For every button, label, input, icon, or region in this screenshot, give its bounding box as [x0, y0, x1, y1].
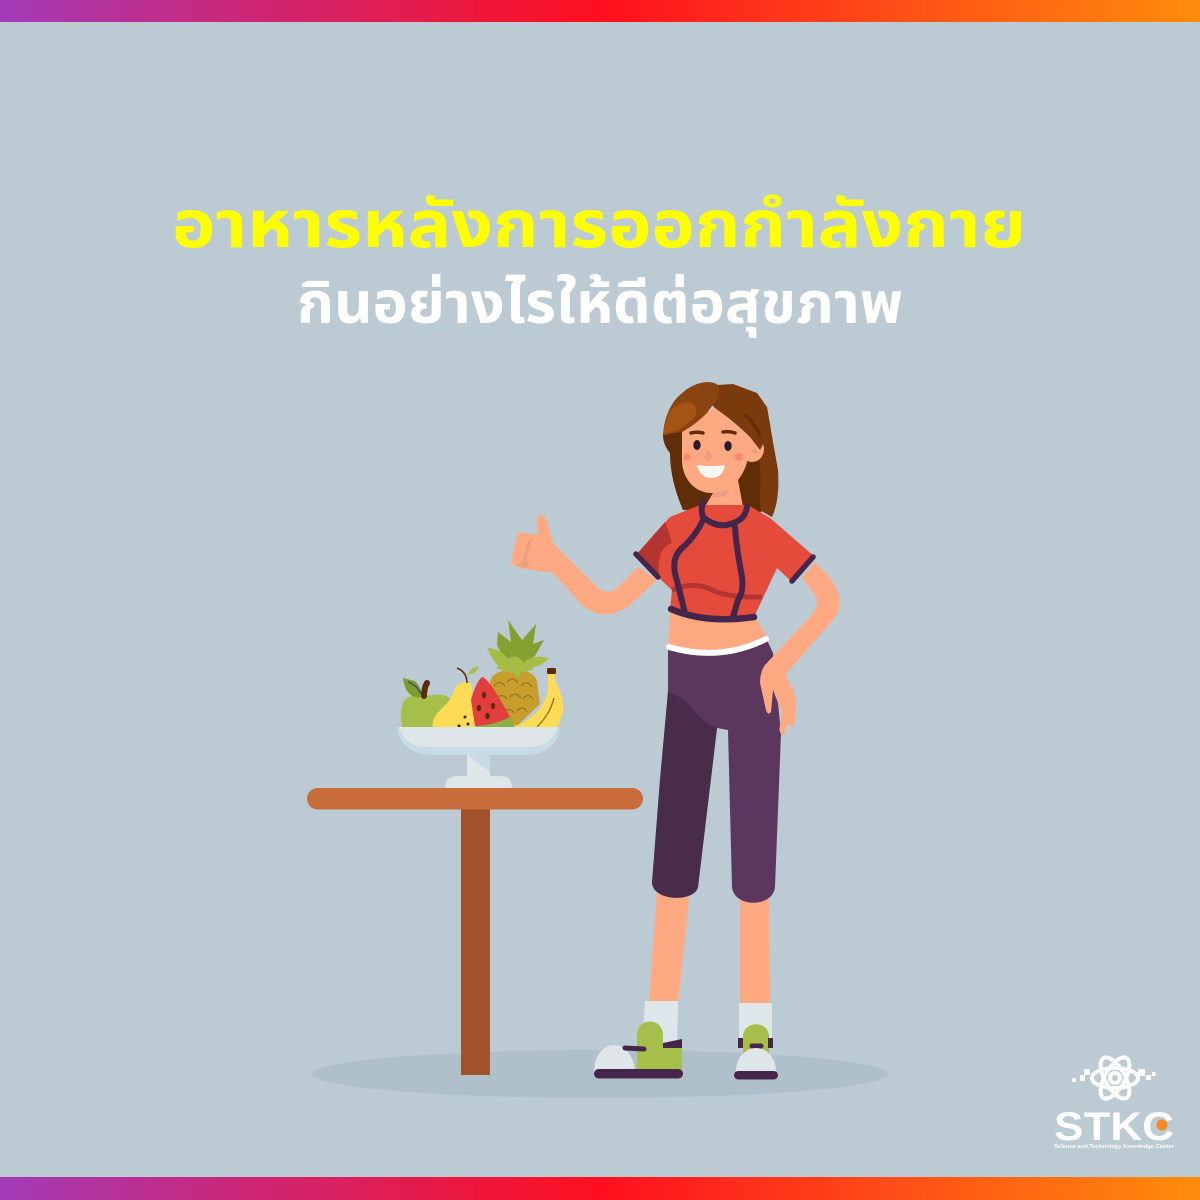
shirt: [636, 502, 815, 619]
logo wordmark: STKC: [1054, 1105, 1174, 1149]
hair back: [663, 420, 761, 512]
trousers: [652, 639, 781, 903]
atom mark: [1092, 1053, 1138, 1103]
raised arm with thumb up: [512, 515, 657, 615]
fruit bowl: [397, 620, 563, 788]
left shoe: [594, 1001, 683, 1078]
nose: [704, 450, 712, 461]
eyebrows and eyes: [691, 432, 735, 433]
cheeks: [684, 454, 690, 460]
head: [663, 382, 771, 493]
table: [307, 788, 643, 1075]
watermelon: [471, 677, 515, 728]
logo tagline: Science and Technology Knowledge Center: [1054, 1144, 1174, 1150]
bowl stem: [467, 755, 490, 777]
left leg: [649, 890, 690, 1004]
top gradient band: [0, 0, 1200, 22]
ground shadow: [312, 1050, 888, 1098]
woman character: [512, 382, 839, 1080]
title: อาหารหลังการออกกำลังกาย: [172, 187, 1026, 261]
pineapple: [487, 620, 549, 726]
logo dot: [1156, 1120, 1168, 1130]
banana: [510, 668, 563, 728]
pixel wings: [1072, 1069, 1156, 1082]
hand-on-hip arm: [760, 562, 839, 735]
fringe: [707, 384, 771, 450]
right leg: [740, 895, 770, 1005]
neck: [703, 480, 744, 522]
bowl foot: [445, 776, 512, 788]
pear: [433, 666, 479, 728]
right shoe: [734, 1003, 778, 1080]
bottom gradient band: [0, 1177, 1200, 1200]
STKC logo: [1054, 1053, 1174, 1150]
smile: [697, 465, 725, 478]
torso: [668, 612, 767, 651]
subtitle: กินอย่างไรให้ดีต่อสุขภาพ: [297, 271, 903, 338]
apple: [401, 678, 451, 728]
bowl: [397, 727, 560, 755]
